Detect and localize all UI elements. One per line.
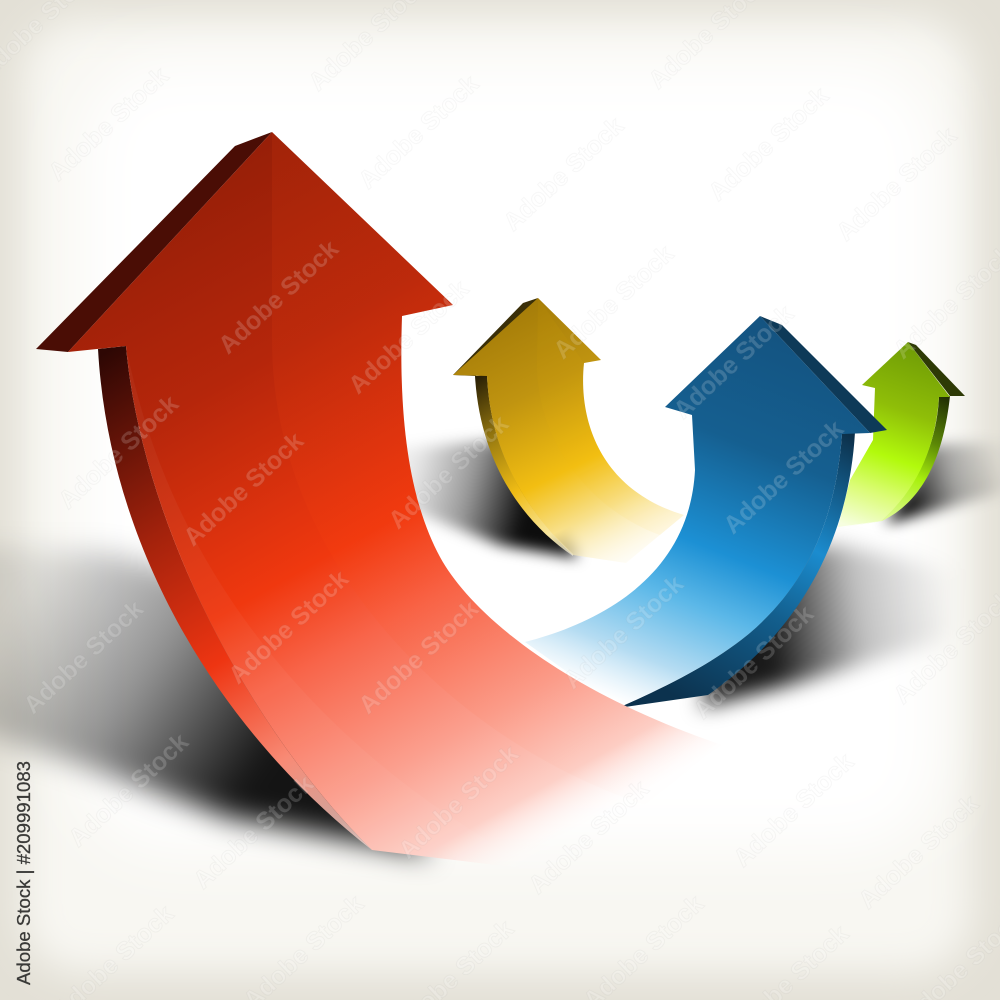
watermark: Adobe Stock (831, 122, 962, 246)
arrow: green (838, 342, 965, 528)
red arrow inner fold (272, 132, 722, 805)
arrow: red (36, 132, 722, 871)
watermark: Adobe Stock (558, 570, 689, 694)
watermark: Adobe Stock (53, 390, 184, 514)
watermark: Adobe Stock (703, 82, 834, 206)
watermark: Adobe Stock (343, 275, 474, 399)
watermark: Adobe Stock (223, 565, 354, 689)
watermark: Adobe Stock (353, 70, 484, 194)
watermark: Adobe Stock (498, 112, 629, 236)
arrow: yellow (453, 298, 684, 563)
watermark: Adobe Stock (393, 740, 524, 864)
shadow: blue arrow (700, 545, 955, 708)
shadow: red arrow (0, 545, 430, 855)
watermark: Adobe Stock (18, 595, 149, 719)
red arrow head side (36, 132, 272, 352)
watermark: Adobe Stock (728, 748, 859, 872)
arrow: blue (525, 316, 887, 708)
stock id label: Adobe Stock | #209991083 (13, 761, 34, 985)
watermark: Adobe Stock (353, 595, 484, 719)
watermark: Adobe Stock (668, 300, 799, 424)
red arrow top face (68, 132, 722, 871)
watermark: Adobe Stock (178, 427, 309, 551)
red arrow shaft side (98, 346, 372, 850)
watermark: Adobe Stock (63, 728, 194, 852)
watermark: Adobe Stock (688, 600, 819, 724)
watermark: Adobe Stock (43, 62, 174, 186)
watermark: Adobe Stock (383, 410, 514, 534)
watermark: Adobe Stock (213, 235, 344, 359)
shadow: green arrow (885, 440, 1000, 524)
watermark: Adobe Stock (523, 775, 654, 899)
red arrow lower band (126, 346, 545, 871)
watermark: Adobe Stock (548, 240, 679, 364)
watermark: Adobe Stock (188, 770, 319, 894)
shadow: yellow arrow (400, 440, 578, 558)
watermark: Adobe Stock (718, 415, 849, 539)
watermark: Adobe Stock (853, 790, 984, 914)
